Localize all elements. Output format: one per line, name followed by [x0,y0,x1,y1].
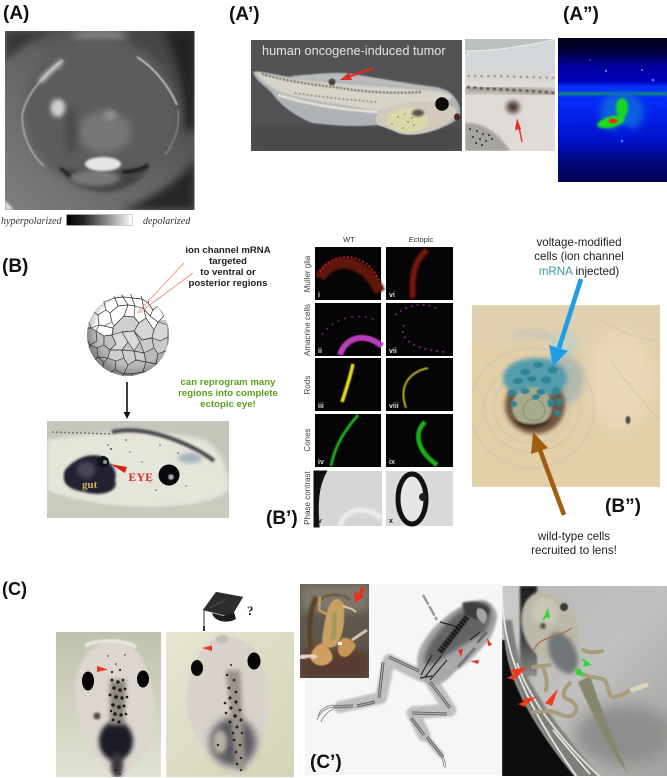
red arrowheads [458,638,492,664]
label: B: (B) [2,256,28,277]
arrow: control tadpole [97,666,108,672]
illustration: blastula embryo [87,294,169,376]
frog silhouette [340,660,450,755]
icon: graduation cap [203,592,254,631]
panel: lens image [470,305,660,487]
label: A: (A) [3,3,29,24]
green arrows [543,608,592,677]
legend: voltage scale [1,214,191,227]
callout: reprogram: can reprogram many [181,377,276,388]
callout: reprogram [178,377,278,410]
row labels: Cones [303,428,312,452]
arrow: ectopic tadpole [202,646,212,651]
panel: frog x-ray [305,584,502,775]
column titles: WT [343,235,355,244]
callout: ion channel mRNA [185,245,271,289]
panel: retina marker grid [303,235,453,526]
caption: tumor: human oncogene-induced tumor [262,43,446,58]
injection needle lines [137,263,193,313]
panel: retina marker grid: viii [389,403,399,410]
callout: voltage-modified cells: voltage-modified [536,236,622,249]
column titles: Ectopic [409,235,434,244]
panel: retina marker grid: ix [389,459,395,466]
column titles [343,235,434,244]
callout: voltage-modified cells: cells (ion channel [534,250,624,263]
callout: ion channel mRNA: posterior regions [189,278,267,289]
legend: voltage scale: hyperpolarized [1,216,63,227]
callout: ion channel mRNA: targeted [209,256,247,267]
callout: ion channel mRNA: to ventral or [200,267,256,278]
panel: tumor close-up [465,39,555,151]
label: A prime: (A’) [229,4,260,25]
red arrows [507,667,558,707]
arrow: brown to lens [531,432,564,515]
panel: tadpole with ectopic brain [166,632,294,778]
callout: reprogram: ectopic eye! [200,399,256,410]
callout: ion channel mRNA: ion channel mRNA [185,245,271,256]
label: C prime: (C’) [310,752,342,773]
panel: retina marker grid: iii [318,403,324,410]
panel: retina marker grid: vii [389,348,397,355]
panel: retina marker grid: i [318,292,320,299]
panel: frog photo inset [300,584,369,680]
panel: voltage dye embryo image [5,30,195,210]
callout: wild-type cells: recruited to lens! [531,544,617,557]
frog body [520,591,579,662]
panel: retina marker grid: ii [318,348,322,355]
arrow: blue to modified cells [549,279,581,366]
panel: tadpole with ectopic eye [47,421,229,518]
row labels: Phase contrast [303,471,312,525]
callout: voltage-modified cells [534,236,624,278]
arrow: tumor [340,68,373,80]
panel: tadpole control [56,632,161,778]
callout: voltage-modified cells: mRNA injected) [539,265,619,278]
label: B prime: (B’) [266,508,298,529]
label: gut: gut [82,479,98,491]
panel: retina marker grid: vi [389,292,395,299]
callout: wild-type cells: wild-type cells [537,530,610,543]
arrow: blastula to tadpole [124,382,130,419]
panel: retina marker grid: iv [318,459,324,466]
panel: retina marker grid: x [389,518,393,525]
row labels: Muller glia [303,255,312,292]
panel: retina marker grid: v [318,518,322,525]
legend: voltage scale: depolarized [143,216,191,227]
callout: reprogram: regions into complete [178,388,278,399]
tadpole body [253,72,460,135]
label: B double prime: (B”) [605,496,641,517]
label: EYE: EYE [128,472,153,484]
arrow: inset [354,588,365,603]
panel: tadpole with tumor [251,40,462,151]
panel: frog in dish [502,583,667,778]
callout: wild-type cells [531,530,617,557]
arrow: close-up [515,118,522,142]
label: C: (C) [2,579,27,599]
row labels [303,255,312,525]
arrow: eye [110,464,127,473]
panel: fluorescence [558,38,667,182]
question mark: ? [247,603,254,618]
label: A double prime: (A”) [563,4,599,25]
row labels: Amacrine cells [303,304,312,356]
row labels: Rods [303,376,312,394]
